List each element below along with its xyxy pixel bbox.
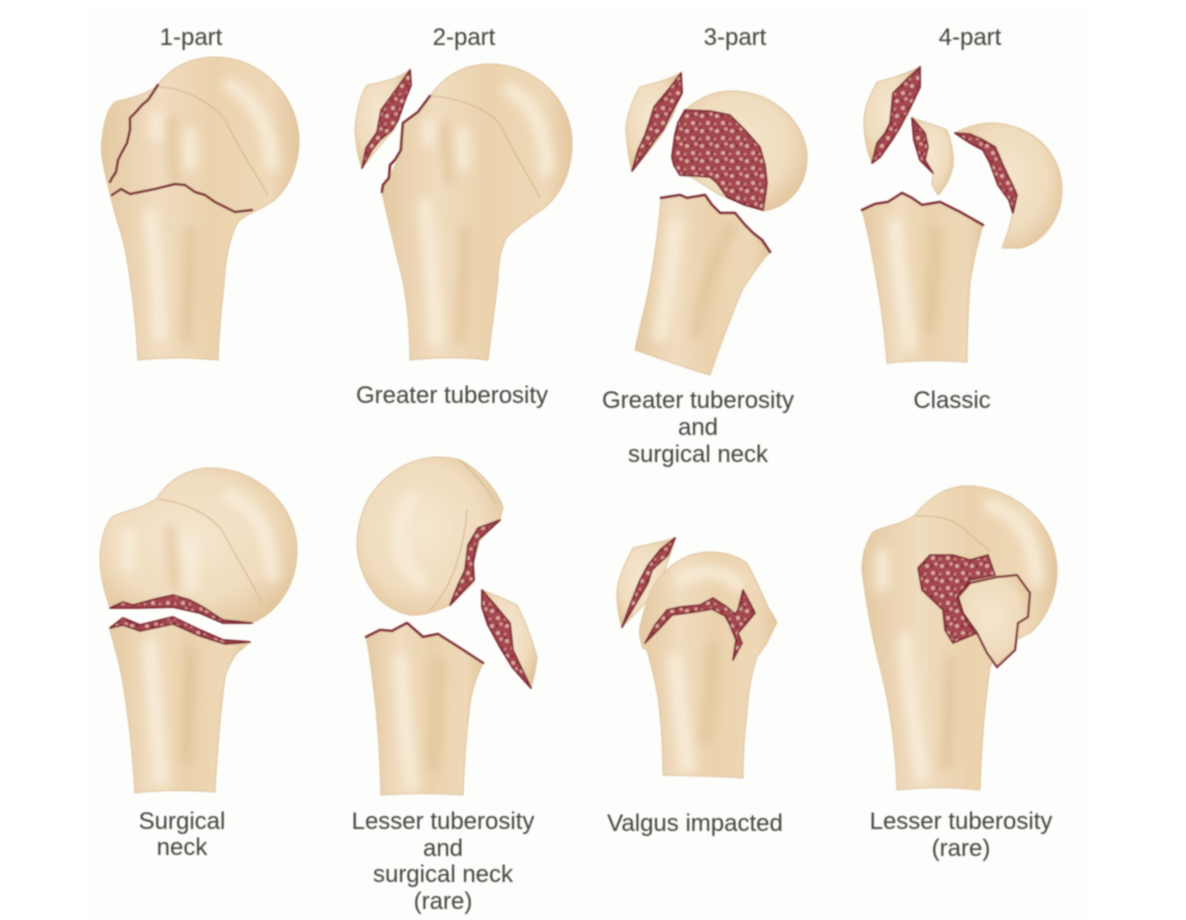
bone: 1-part surgical neck: [100, 468, 297, 793]
label: greater tuberosity and surgical neck: and: [678, 414, 718, 441]
label: lesser tuberosity and surgical neck (rare): (rare): [414, 888, 472, 915]
bone: 4-part classic: [862, 67, 1062, 363]
label: surgical neck: [139, 808, 225, 861]
label: surgical neck: Surgical: [139, 808, 225, 835]
label: lesser tuberosity (rare): (rare): [932, 835, 990, 862]
bone: 3-part greater tuberosity and surgical neck: [626, 73, 807, 375]
label: lesser tuberosity and surgical neck (rare): and: [423, 835, 463, 862]
label: lesser tuberosity (rare): Lesser tuberosity: [870, 808, 1052, 835]
label: lesser tuberosity and surgical neck (rare): surgical neck: [373, 861, 514, 888]
label: 1-part: 1-part: [160, 24, 223, 51]
bone: 2-part lesser tuberosity (rare): [862, 486, 1057, 790]
label: lesser tuberosity (rare): [870, 808, 1052, 862]
bone: 2-part lesser tuberosity and surgical neck (head, fragment, shaft): [357, 457, 537, 795]
label: 3-part: 3-part: [704, 24, 767, 51]
label: 4-part: 4-part: [939, 24, 1002, 51]
label: 2-part: 2-part: [433, 24, 496, 51]
label: greater tuberosity and surgical neck: surgical neck: [628, 441, 769, 468]
bone: 1-part with minimally displaced fracture lines: [101, 57, 299, 360]
bone: 2-part greater tuberosity: [355, 64, 572, 360]
label: surgical neck: neck: [157, 834, 208, 861]
label: greater tuberosity and surgical neck: [602, 387, 794, 468]
label: greater tuberosity and surgical neck: Greater tuberosity: [602, 387, 794, 414]
label: greater tuberosity: Greater tuberosity: [356, 382, 548, 409]
label: lesser tuberosity and surgical neck (rare): [352, 808, 534, 915]
label: valgus impacted: Valgus impacted: [607, 810, 783, 837]
bone: valgus impacted (fragment and impacted head): [617, 538, 777, 778]
label: lesser tuberosity and surgical neck (rare): Lesser tuberosity: [352, 808, 534, 835]
label: classic: Classic: [913, 387, 991, 414]
